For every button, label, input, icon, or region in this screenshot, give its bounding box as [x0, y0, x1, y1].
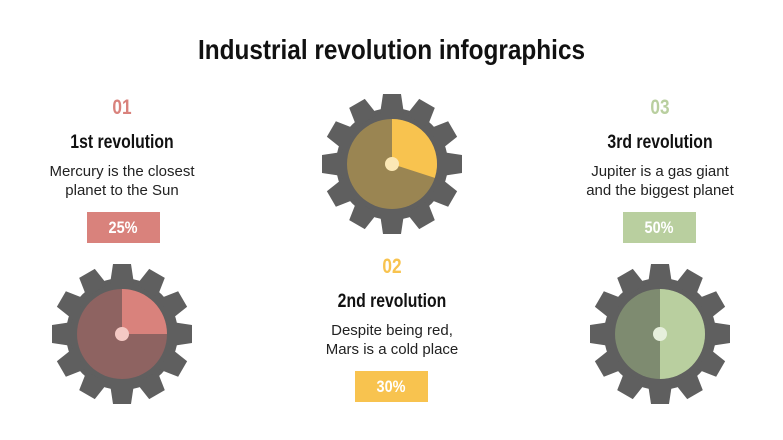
text 3rd: Jupiter is a gas giant: [591, 163, 729, 180]
badge 25%: 25%: [109, 218, 138, 237]
badge 50%: [623, 212, 696, 243]
text 2nd: [326, 322, 458, 358]
number 01: 01: [112, 96, 132, 119]
heading 1st: 1st revolution: [70, 132, 174, 153]
title: Industrial revolution infographics: [198, 34, 585, 65]
panel: 1st revolution: [49, 96, 195, 199]
text 2nd: Despite being red,: [331, 322, 453, 339]
text 1st: [49, 163, 195, 199]
panel: 3rd revolution: [586, 96, 734, 199]
number 03: 03: [650, 96, 670, 119]
text 1st: planet to the Sun: [65, 182, 179, 199]
gear 1 pie 25%: [52, 264, 192, 404]
text 3rd: [586, 163, 734, 199]
number 02: 02: [382, 255, 402, 278]
panel: 2nd revolution: [326, 255, 458, 358]
heading 2nd: 2nd revolution: [338, 291, 446, 312]
text 3rd: and the biggest planet: [586, 182, 734, 199]
gear 2 pie 30%: [322, 94, 462, 234]
text 2nd: Mars is a cold place: [326, 341, 458, 358]
heading 3rd: 3rd revolution: [607, 132, 713, 153]
badge 50%: 50%: [645, 218, 674, 237]
text 1st: Mercury is the closest: [49, 163, 195, 180]
badge 25%: [87, 212, 160, 243]
badge 30%: [355, 371, 428, 402]
gear 3 pie 50%: [590, 264, 730, 404]
badge 30%: 30%: [377, 377, 406, 396]
